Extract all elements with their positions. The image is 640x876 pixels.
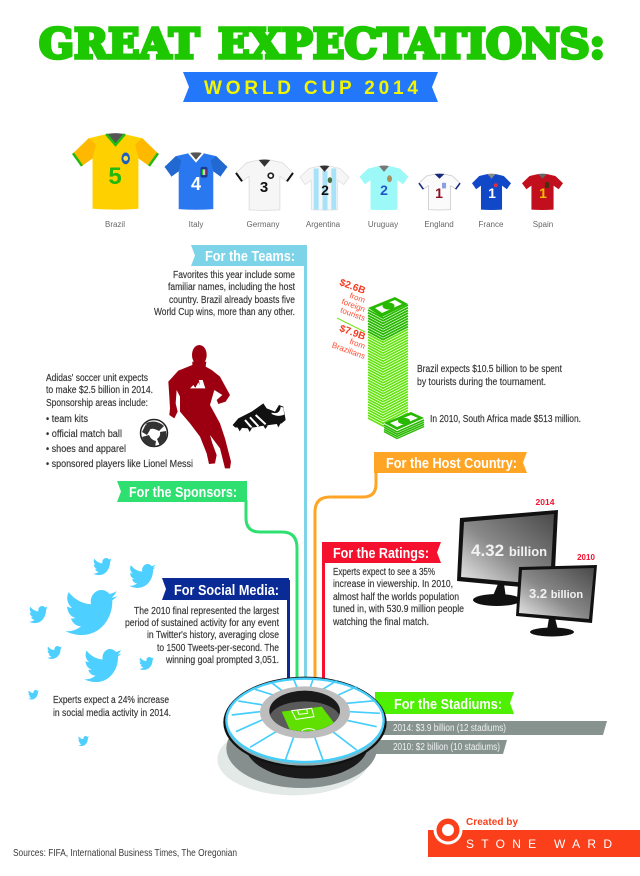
labels: spending split: from	[348, 291, 367, 305]
text: ratings: increase in viewership. In 2010,	[333, 579, 453, 590]
text: sponsors: • sponsored players like Lionel Messi	[46, 459, 193, 470]
icon: player silhouette	[168, 345, 231, 468]
title: EXPECTATIONS:	[218, 19, 605, 68]
jersey: Germany: 3	[260, 179, 268, 196]
sources: Sources: FIFA, International Business Times, The Oregonian	[13, 848, 237, 859]
bar: 2010 stadium spend: 2010: $2 billion (10 stadiums)	[393, 742, 500, 753]
jersey: Brazil	[73, 133, 158, 229]
title	[39, 19, 605, 68]
panel: teams	[154, 245, 307, 318]
connector: ratings	[322, 545, 325, 685]
chart: 2010 monitor	[516, 553, 597, 636]
heading: for the sponsors: For the Sponsors:	[129, 484, 237, 501]
text: social media: winning goal prompted 3,051.	[165, 655, 279, 666]
heading: for the sponsors	[117, 481, 247, 502]
panel: sponsors	[46, 345, 286, 502]
heading: for the ratings: For the Ratings:	[333, 545, 429, 562]
small money stack	[384, 412, 424, 439]
jersey: Brazil: 5	[108, 163, 122, 190]
labels: spending split: $2.6B	[338, 277, 367, 297]
text: host country: In 2010, South Africa made $513 million.	[430, 414, 581, 425]
heading: for social media	[162, 578, 289, 600]
icon: football boot	[233, 403, 286, 432]
jersey: England	[419, 174, 460, 229]
connector: sponsors	[246, 500, 297, 685]
labels: spending split	[331, 277, 367, 361]
text: ratings: watching the final match.	[332, 617, 429, 628]
jersey: Argentina: Argentina	[306, 220, 341, 229]
jersey: Brazil: Brazil	[105, 220, 125, 229]
text: teams: familiar names, including the host	[168, 282, 295, 293]
icons: twitter birds	[28, 558, 156, 746]
jersey: Spain: Spain	[533, 220, 553, 229]
jersey: Uruguay: Uruguay	[368, 220, 398, 229]
text: social media: to 1500 Tweets-per-second. The	[157, 643, 279, 654]
jersey: Germany: Germany	[247, 220, 279, 229]
subtitle ribbon	[183, 72, 438, 102]
text: sponsors: to make $2.5 billion in 2014.	[46, 385, 153, 396]
text: sponsors: • official match ball	[46, 429, 122, 440]
bar: 2014 stadium spend	[380, 721, 607, 735]
heading: for the stadiums	[375, 692, 514, 714]
jersey: Uruguay	[359, 166, 409, 229]
jersey: Italy	[164, 152, 228, 229]
jersey: Italy: 4	[191, 174, 201, 194]
labels: spending split: foreign	[340, 297, 366, 314]
subtitle ribbon: WORLD CUP 2014	[204, 78, 418, 99]
chart: 2010 monitor: 3.2 billion	[529, 586, 583, 601]
text: sponsors: Sponsorship areas include:	[46, 398, 148, 409]
jersey: France: France	[479, 220, 504, 229]
text: social media	[125, 606, 279, 666]
text: ratings: tuned in, with 530.9 million people	[333, 604, 464, 615]
icon: stadium	[217, 677, 387, 795]
jerseys row	[73, 133, 563, 229]
text: sponsors	[46, 373, 193, 470]
text: social media: period of sustained activity for any event	[125, 618, 279, 629]
jersey: France: 1	[488, 185, 496, 201]
chart: 2014 monitor: 4.32 billion	[471, 541, 547, 560]
text: ratings	[332, 567, 464, 628]
jersey: Italy: Italy	[189, 220, 203, 229]
chart: 2014 monitor	[457, 497, 558, 606]
text: sponsors: Adidas' soccer unit expects	[46, 373, 148, 384]
text: social media forecast: Experts expect a 24% increase	[53, 695, 169, 706]
text: social media forecast: in social media activity in 2014.	[53, 708, 171, 719]
heading: for social media: For Social Media:	[174, 582, 279, 599]
text: host country	[417, 364, 581, 425]
chart: 2014 monitor: 2014	[536, 497, 555, 507]
jersey: Argentina: 2	[321, 182, 329, 198]
jersey: Spain: 1	[539, 185, 547, 201]
panel: stadiums	[217, 677, 607, 795]
chart: 2010 monitor: 2010	[577, 553, 595, 562]
bar: 2010 stadium spend	[370, 740, 507, 754]
labels: spending split: Brazilians	[331, 341, 366, 361]
labels: spending split: $7.9B	[338, 323, 367, 343]
panel: host country	[331, 277, 581, 473]
jersey: England: 1	[435, 185, 443, 201]
jersey: England: England	[424, 220, 454, 229]
panel: social media	[28, 558, 289, 746]
jersey: Spain	[522, 174, 563, 229]
text: social media forecast	[53, 695, 171, 719]
jersey: Germany	[236, 159, 293, 229]
heading: for the teams: For the Teams:	[205, 248, 295, 265]
text: host country: by tourists during the tournament.	[417, 377, 546, 388]
logo: Stone Ward	[428, 816, 640, 857]
text: ratings: almost half the worlds population	[333, 592, 459, 603]
text: sponsors: • shoes and apparel	[46, 444, 126, 455]
labels: spending split: from	[348, 337, 367, 351]
jersey: Argentina	[300, 166, 349, 229]
heading: for the stadiums: For the Stadiums:	[394, 696, 502, 713]
text: teams: country. Brazil already boasts five	[169, 295, 295, 306]
connector: teams	[304, 245, 307, 685]
heading: for the host country	[374, 452, 527, 473]
text: teams: Favorites this year include some	[173, 270, 295, 281]
text: social media: in Twitter's history, averaging close	[147, 630, 279, 641]
icon: soccer ball	[140, 420, 168, 447]
text: host country: Brazil expects $10.5 billion to be spent	[417, 364, 562, 375]
text: social media: The 2010 final represented the largest	[134, 606, 279, 617]
text: sponsors: • team kits	[46, 414, 88, 425]
labels: spending split: tourists	[339, 306, 366, 323]
heading: for the teams	[191, 245, 307, 266]
text: teams	[154, 270, 295, 318]
connector: social media	[287, 580, 290, 685]
text: teams: World Cup wins, more than any other.	[154, 307, 295, 318]
logo: Stone Ward: STONE WARD	[466, 837, 612, 851]
jersey: Uruguay: 2	[380, 182, 388, 198]
connector: host country	[315, 470, 376, 685]
title: GREAT	[39, 20, 200, 68]
chart: money stack	[368, 297, 424, 439]
text: ratings: Experts expect to see a 35%	[333, 567, 435, 578]
logo: Stone Ward: Created by	[466, 817, 518, 828]
jersey: France	[472, 174, 511, 229]
heading: for the host country: For the Host Country:	[386, 455, 517, 472]
bar: 2014 stadium spend: 2014: $3.9 billion (12 stadiums)	[393, 723, 506, 734]
panel: ratings	[322, 497, 597, 636]
